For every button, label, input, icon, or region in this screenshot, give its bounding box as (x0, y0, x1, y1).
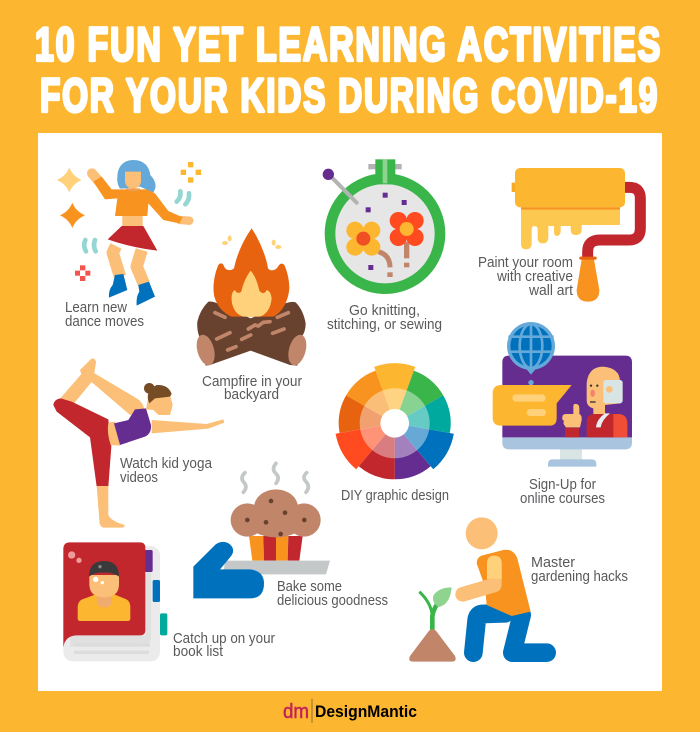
label: paint: Paint your room (478, 254, 573, 271)
activity: graphic design (336, 363, 454, 504)
label: reading: book list (173, 643, 224, 660)
label: paint: wall art (528, 282, 574, 299)
label: campfire: backyard (224, 386, 279, 403)
label: gardening: gardening hacks (531, 568, 628, 585)
label: knitting (327, 302, 442, 333)
label: dance: dance moves (65, 313, 144, 330)
icon: muffin and oven mitt (193, 463, 330, 598)
label: yoga: Watch kid yoga (120, 455, 213, 472)
label: paint: with creative (496, 268, 573, 285)
logo: DesignMantic (283, 699, 417, 723)
activity: campfire (194, 228, 309, 403)
activity: yoga (53, 358, 224, 528)
icon: colour wheel (336, 363, 454, 479)
icon: campfire (194, 228, 309, 367)
icon: paint roller (512, 168, 640, 302)
label: online courses: online courses (520, 490, 605, 507)
label: knitting: stitching, or sewing (327, 316, 442, 333)
label: baking: delicious goodness (277, 592, 388, 609)
icon: yoga pose (53, 358, 224, 528)
label: online courses (520, 476, 605, 507)
label: paint (478, 254, 574, 299)
label: yoga (120, 455, 213, 486)
activity: reading (63, 542, 275, 661)
activity: paint (478, 168, 640, 302)
icon: gardener and plant (409, 517, 547, 662)
title (35, 18, 662, 122)
label: gardening: Master (531, 554, 575, 571)
label: graphic design: DIY graphic design (341, 487, 449, 504)
icon: dancer (57, 160, 201, 306)
panel: white activities background (38, 133, 662, 691)
icon: book (63, 542, 167, 661)
label: baking: Bake some (277, 578, 342, 595)
label: gardening (531, 554, 628, 585)
label: baking (277, 578, 388, 609)
activity: dance (57, 160, 201, 330)
logo: DesignMantic: DesignMantic (315, 703, 417, 721)
label: reading: Catch up on your (173, 630, 275, 647)
activity: baking (193, 463, 388, 609)
label: dance (65, 299, 144, 330)
label: dance: Learn new (65, 299, 127, 316)
activity: knitting (323, 159, 442, 333)
activity: online courses (493, 322, 632, 507)
label: campfire (202, 373, 302, 403)
icon: computer with teacher (493, 322, 632, 467)
label: online courses: Sign-Up for (529, 476, 596, 493)
label: yoga: videos (120, 469, 158, 486)
label: campfire: Campfire in your (202, 373, 302, 390)
icon: embroidery hoop (323, 159, 440, 289)
activity: gardening (409, 517, 628, 662)
label: reading (173, 630, 275, 660)
logo: DesignMantic: dm (283, 701, 309, 723)
label: knitting: Go knitting, (349, 302, 420, 319)
